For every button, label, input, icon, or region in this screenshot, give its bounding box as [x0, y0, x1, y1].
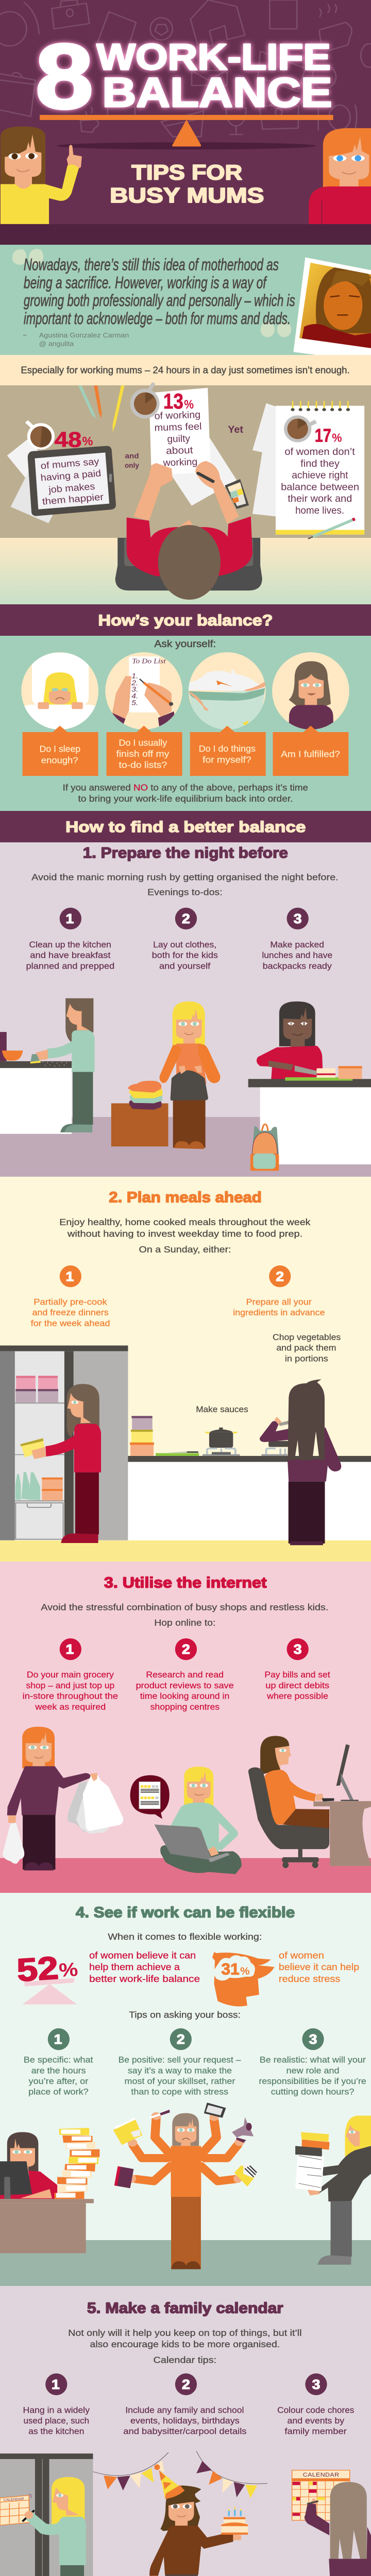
- number badges: 1: [66, 1642, 74, 1657]
- numbered tips: are the hours: [31, 2066, 86, 2075]
- heading: 2. Plan meals ahead: [109, 1189, 262, 1206]
- numbered tips: say it’s a way to make the: [128, 2066, 232, 2075]
- numbered tips: and yourself: [159, 961, 211, 971]
- annotation: chop vegetables: [273, 1333, 341, 1363]
- numbered tips: used place, such: [23, 2416, 89, 2426]
- question card: bath: [188, 652, 266, 732]
- stat: 31 percent: of women: [279, 1951, 324, 1961]
- numbered tips: Prepare all your: [246, 1297, 312, 1307]
- numbered tips: Partially pre-cook: [33, 1297, 107, 1307]
- answer boxes: Do I sleep: [40, 743, 80, 754]
- stat: 17 percent notebook: [252, 401, 364, 539]
- illustration: stacked containers and stove: [128, 1416, 371, 1540]
- numbered tips: you’re after, or: [29, 2077, 89, 2086]
- numbered tips: lunches and have: [262, 951, 332, 960]
- numbered tips: and have breakfast: [30, 951, 111, 960]
- number badges: 3: [294, 1642, 302, 1657]
- numbered tips: [23, 2374, 354, 2436]
- title: 8: [36, 25, 93, 128]
- conclusion text: [63, 783, 308, 804]
- stat: 52 percent: of women believe it can: [89, 1951, 196, 1961]
- stat: 13 percent paper: mums feel: [154, 421, 202, 433]
- character: woman at desk from above: [115, 461, 262, 600]
- heading: 4. See if work can be flexible: [76, 1904, 295, 1921]
- numbered tips: 3: [294, 911, 302, 926]
- number badges: [60, 1638, 309, 1660]
- tip text: time looking around in: [140, 1691, 229, 1701]
- icon: seesaw balance: [40, 115, 333, 149]
- header panel: [0, 0, 371, 245]
- heading: How’s your balance?: [98, 611, 273, 629]
- numbered tips: 1: [66, 911, 74, 926]
- character: woman writing on wall calendar: CALENDAR: [303, 2471, 339, 2478]
- label: and only: only: [125, 462, 140, 470]
- icon: phone: [225, 479, 249, 509]
- answer boxes: to-do lists?: [119, 760, 167, 770]
- annotation: chop vegetables: Chop vegetables: [273, 1333, 341, 1342]
- character: woman making lunches: [248, 1002, 371, 1164]
- numbered tips: family member: [284, 2427, 347, 2436]
- stat: 13 percent paper: %: [184, 398, 194, 412]
- stat: 17 percent notebook: of women don’t: [284, 447, 355, 457]
- numbered tips: planned and prepped: [26, 961, 114, 971]
- panel: 24 hours intro: [0, 355, 371, 385]
- character: woman with laptop and review bubble: [130, 1767, 242, 1874]
- numbered tips: and freeze dinners: [32, 1308, 109, 1317]
- question card: sleep: [21, 652, 99, 734]
- intro: Calendar tips:: [154, 2354, 216, 2365]
- numbered tips: 2: [182, 911, 190, 926]
- stat: 52 percent: %: [58, 1959, 79, 1981]
- panel: desk scene statistics: [0, 383, 371, 604]
- stat: 17 percent notebook: %: [332, 431, 342, 445]
- icon: backpack: [250, 1124, 279, 1171]
- title: WORK-LIFE: [96, 37, 331, 77]
- intro: Not only will it help you keep on top of things, but it’ll: [68, 2328, 301, 2338]
- intro: On a Sunday, either:: [139, 1244, 231, 1255]
- tip text: week as required: [35, 1702, 106, 1711]
- numbered tips: 1: [54, 2031, 62, 2047]
- heading: 1. Prepare the night before: [83, 844, 288, 861]
- panel: how to find a better balance banner: [0, 811, 371, 842]
- stat: 31 percent: 31: [221, 1960, 240, 1978]
- stat: 13 percent paper: guilty: [167, 433, 191, 445]
- intro: Enjoy healthy, home cooked meals throughout the week: [59, 1217, 311, 1227]
- stat: 13 percent paper: working: [162, 456, 198, 468]
- question card: to-do list: To Do List: [132, 657, 166, 665]
- numbered tips: Be positive: sell your request –: [119, 2055, 241, 2064]
- heading: How to find a better balance: [65, 818, 306, 836]
- panel: tip 2 plan meals ahead: [0, 1177, 371, 1562]
- numbered tips: cutting down hours?: [271, 2087, 354, 2096]
- numbered tips: [31, 1265, 325, 1328]
- annotation: chop vegetables: in portions: [285, 1354, 328, 1363]
- decoration: bunting: [93, 2451, 267, 2498]
- numbered tips: Lay out clothes,: [153, 940, 216, 950]
- label: and only: and: [125, 452, 139, 460]
- numbered tips: 2: [276, 1269, 284, 1284]
- character: woman writing on wall calendar: [292, 2470, 371, 2576]
- stat: 13 percent paper: 13: [163, 389, 183, 413]
- numbered tips: 1: [66, 1269, 74, 1284]
- numbered tips: most of your skillset, rather: [125, 2077, 235, 2086]
- title: BALANCE: [102, 69, 332, 115]
- subheading: Tips on asking your boss:: [129, 2009, 241, 2020]
- numbered tips: 3: [309, 2031, 317, 2047]
- tip text: [23, 1670, 330, 1711]
- stat: 17 percent notebook: balance between: [281, 482, 359, 493]
- answer boxes: Do I usually: [119, 737, 167, 748]
- stat: 48 percent tablet: [7, 421, 116, 523]
- numbered tips: [26, 908, 332, 971]
- character: woman at fridge with calendar: [0, 2453, 93, 2576]
- intro: [31, 872, 339, 897]
- numbered tips: for the week ahead: [31, 1319, 110, 1328]
- numbered tips: new role and: [286, 2066, 339, 2075]
- question card: to-do list: 5.: [131, 699, 138, 707]
- question card: to-do list: 3.: [131, 686, 138, 693]
- character: woman wiping kitchen: [0, 998, 95, 1134]
- stat: 13 percent paper: about: [166, 445, 193, 456]
- attribution: Agustina Gonzalez Carman: [39, 331, 129, 339]
- numbered tips: 2: [182, 2377, 190, 2392]
- numbered tips: Make packed: [270, 940, 324, 950]
- intro: [59, 1217, 311, 1255]
- stat: 31 percent: believe it can help: [279, 1962, 359, 1973]
- numbered tips: and events by: [287, 2416, 345, 2426]
- panel: tip 1 prepare the night before: [0, 842, 371, 1177]
- character: woman at fridge with calendar: CALENDAR: [4, 2497, 24, 2502]
- conclusion text: If you answered NO to any of the above, perhaps it’s time: [63, 783, 308, 792]
- numbered tips: backpacks ready: [263, 961, 332, 971]
- stat: 48 percent tablet: of mums say: [40, 456, 100, 471]
- tip text: up direct debits: [265, 1681, 329, 1690]
- intro: Evenings to-dos:: [147, 887, 223, 897]
- stat: 48 percent tablet: %: [82, 435, 93, 448]
- question card: to-do list: 2.: [131, 679, 138, 687]
- numbered tips: Be realistic: what will your: [260, 2055, 366, 2064]
- numbered tips: and babysitter/carpool details: [123, 2427, 246, 2436]
- panel: tip 5 make a family calendar: [0, 2286, 371, 2576]
- tip text: shop – and just top up: [26, 1681, 114, 1690]
- character: woman on right: [309, 128, 371, 224]
- numbered tips: both for the kids: [152, 951, 218, 960]
- numbered tips: Include any family and school: [125, 2405, 244, 2415]
- subtitle: TIPS FOR: [131, 161, 242, 184]
- quote text: [24, 256, 295, 328]
- stat: 17 percent notebook: 17: [315, 425, 331, 446]
- numbered tips: Hang in a widely: [23, 2405, 90, 2415]
- numbered tips: Clean up the kitchen: [29, 940, 111, 950]
- answer boxes: [23, 726, 348, 776]
- illustration: fridge and woman: [0, 1346, 128, 1543]
- character: woman tasting at stove: [260, 1379, 341, 1545]
- character: woman carrying stack of papers: [295, 2115, 371, 2265]
- stat: 31 percent: %: [240, 1964, 249, 1977]
- intro: When it comes to flexible working:: [108, 1931, 262, 1942]
- subtitle: [110, 161, 264, 207]
- answer boxes: for myself?: [203, 754, 251, 765]
- character: woman at desk with binders: [0, 2128, 99, 2253]
- question card: to-do list: [104, 652, 182, 734]
- intro: Avoid the manic morning rush by getting organised the night before.: [31, 872, 339, 882]
- character: woman folding clothes: [111, 1002, 220, 1149]
- numbered tips: place of work?: [28, 2087, 89, 2096]
- stat: 48 percent tablet: job makes: [48, 482, 95, 496]
- stat: 52 percent: better work-life balance: [89, 1974, 200, 1985]
- answer boxes: Do I do things: [199, 743, 256, 754]
- conclusion text: to bring your work-life equilibrium back into order.: [78, 793, 293, 804]
- heading: 5. Make a family calendar: [87, 2300, 283, 2316]
- numbered tips: as the kitchen: [28, 2427, 84, 2436]
- stat: 13 percent paper: [130, 383, 237, 506]
- character: woman at computer desk: [248, 1736, 371, 1868]
- numbered tips: Be specific: what: [24, 2055, 93, 2064]
- numbered tips: 1: [52, 2377, 60, 2392]
- tip text: in-store throughout the: [23, 1691, 118, 1701]
- character: woman pointing up: [1, 126, 82, 224]
- character: multitasking woman with six arms: [113, 2103, 258, 2269]
- stat: 48 percent tablet: having a paid: [40, 468, 102, 483]
- tip text: product reviews to save: [136, 1681, 234, 1690]
- annotation: make sauces: Make sauces: [196, 1405, 248, 1414]
- stat: 52 percent: 52: [15, 1950, 60, 1988]
- stat: 17 percent notebook: their work and: [288, 494, 352, 504]
- character: woman with birthday cake: [149, 2464, 248, 2576]
- stat: 48 percent tablet: 48: [55, 428, 81, 452]
- intro: without having to invest weekday time to food prep.: [67, 1228, 302, 1239]
- heading: 3. Utilise the internet: [104, 1574, 267, 1591]
- character: woman with shopping bags: [3, 1727, 123, 1871]
- panel: how's your balance: [0, 604, 371, 811]
- label: and only: [125, 452, 140, 470]
- tip text: Research and read: [146, 1670, 224, 1680]
- panel: tip 4 see if work can be flexible: [0, 1893, 371, 2286]
- stat: 13 percent paper: of working: [154, 410, 201, 421]
- panel: tip 3 utilise the internet: [0, 1562, 371, 1893]
- answer boxes: finish off my: [116, 749, 170, 759]
- number badges: 2: [182, 1642, 190, 1657]
- tip text: where possible: [266, 1691, 328, 1701]
- intro: [41, 1602, 328, 1628]
- stat: 31 percent: reduce stress: [279, 1974, 340, 1985]
- question card: to-do list: 4.: [131, 692, 138, 700]
- tip text: Do your main grocery: [27, 1670, 114, 1680]
- numbered tips: [24, 2028, 366, 2096]
- numbered tips: than to cope with stress: [131, 2087, 228, 2096]
- intro: [68, 2328, 301, 2365]
- intro: Hop online to:: [154, 1617, 215, 1628]
- stat: 48 percent tablet: them happier: [42, 492, 105, 507]
- intro: Avoid the stressful combination of busy shops and restless kids.: [41, 1602, 328, 1612]
- prompt: Ask yourself:: [154, 639, 216, 650]
- subtitle: BUSY MUMS: [110, 184, 264, 207]
- title: [36, 25, 332, 128]
- photo: Agustina polaroid: [293, 258, 371, 362]
- numbered tips: events, holidays, birthdays: [130, 2416, 240, 2426]
- label: yet: Yet: [228, 425, 243, 435]
- numbered tips: 2: [177, 2031, 185, 2047]
- tip text: shopping centres: [150, 1702, 220, 1711]
- icon: quote marks: [12, 249, 291, 337]
- question card: fulfilled: [272, 652, 349, 732]
- numbered tips: 3: [312, 2377, 320, 2392]
- icon: pencils: [78, 385, 125, 432]
- answer boxes: enough?: [41, 755, 78, 765]
- panel: quote from Agustina: [0, 245, 371, 362]
- stat: 31 percent: [212, 1951, 359, 2006]
- tip text: Pay bills and set: [264, 1670, 330, 1680]
- intro: also encourage kids to be more organised.: [90, 2339, 280, 2349]
- attribution: [23, 331, 129, 347]
- question card: to-do list: 1.: [131, 672, 138, 680]
- stat: 52 percent: [15, 1948, 200, 2004]
- numbered tips: responsibilities be if you’re: [259, 2077, 366, 2086]
- stat: 17 percent notebook: home lives.: [295, 505, 344, 516]
- answer boxes: Am I fulfilled?: [281, 749, 340, 759]
- numbered tips: Colour code chores: [277, 2405, 354, 2415]
- stat: 17 percent notebook: achieve right: [292, 470, 348, 481]
- stat: 17 percent notebook: find they: [300, 459, 340, 469]
- attribution: @ angulita: [39, 340, 74, 347]
- stat: 52 percent: help them achieve a: [89, 1962, 180, 1973]
- annotation: chop vegetables: and pack them: [276, 1343, 336, 1352]
- numbered tips: ingredients in advance: [233, 1308, 325, 1317]
